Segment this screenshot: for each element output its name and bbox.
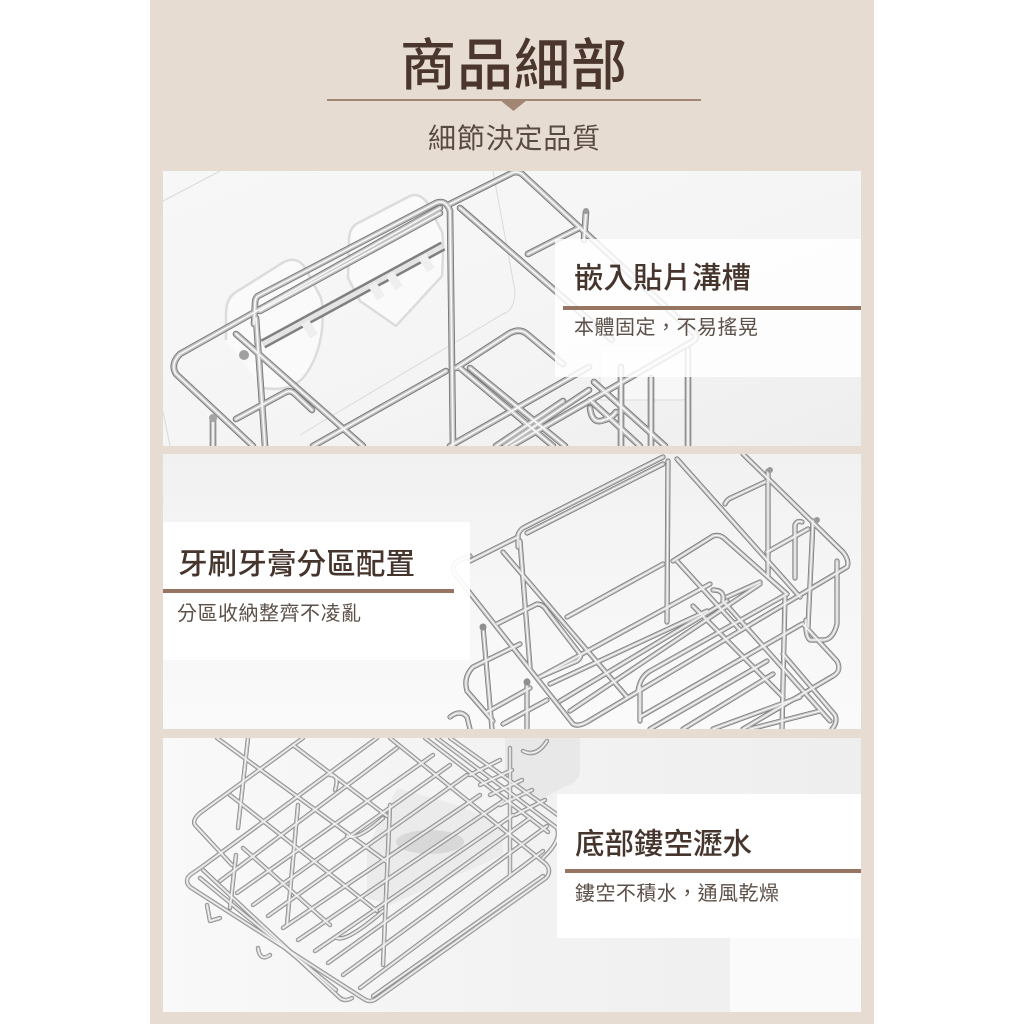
panel 3 background — [163, 738, 861, 1012]
header divider with triangle — [327, 99, 701, 111]
label: 嵌入貼片溝槽: 本體固定，不易搖晃 — [574, 316, 758, 339]
label: 牙刷牙膏分區配置: 牙刷牙膏分區配置 — [178, 548, 415, 581]
label: 底部鏤空瀝水: 鏤空不積水，通風乾燥 — [575, 882, 779, 905]
panel: embedded sticker groove — [163, 171, 861, 446]
panel: toothbrush and toothpaste zones — [163, 454, 861, 729]
label: 底部鏤空瀝水: 底部鏤空瀝水 — [575, 828, 752, 861]
label: 牙刷牙膏分區配置 — [163, 522, 470, 660]
panel 1 background — [163, 171, 861, 446]
panel 2 rack photo — [450, 454, 848, 729]
label: 牙刷牙膏分區配置: 分區收納整齊不凌亂 — [177, 602, 361, 625]
title: 商品細部 — [400, 34, 627, 97]
label: 嵌入貼片溝槽 — [555, 239, 861, 377]
subtitle: 細節決定品質 — [428, 123, 600, 154]
panel 2 background — [163, 454, 861, 729]
label: 嵌入貼片溝槽: 嵌入貼片溝槽 — [574, 262, 751, 295]
beige column — [150, 0, 874, 1024]
panel 1 rack photo — [163, 171, 696, 446]
panel 3 rack photo — [187, 738, 580, 1001]
label: 底部鏤空瀝水 — [557, 794, 861, 938]
panel: hollow drainage base — [163, 738, 861, 1012]
